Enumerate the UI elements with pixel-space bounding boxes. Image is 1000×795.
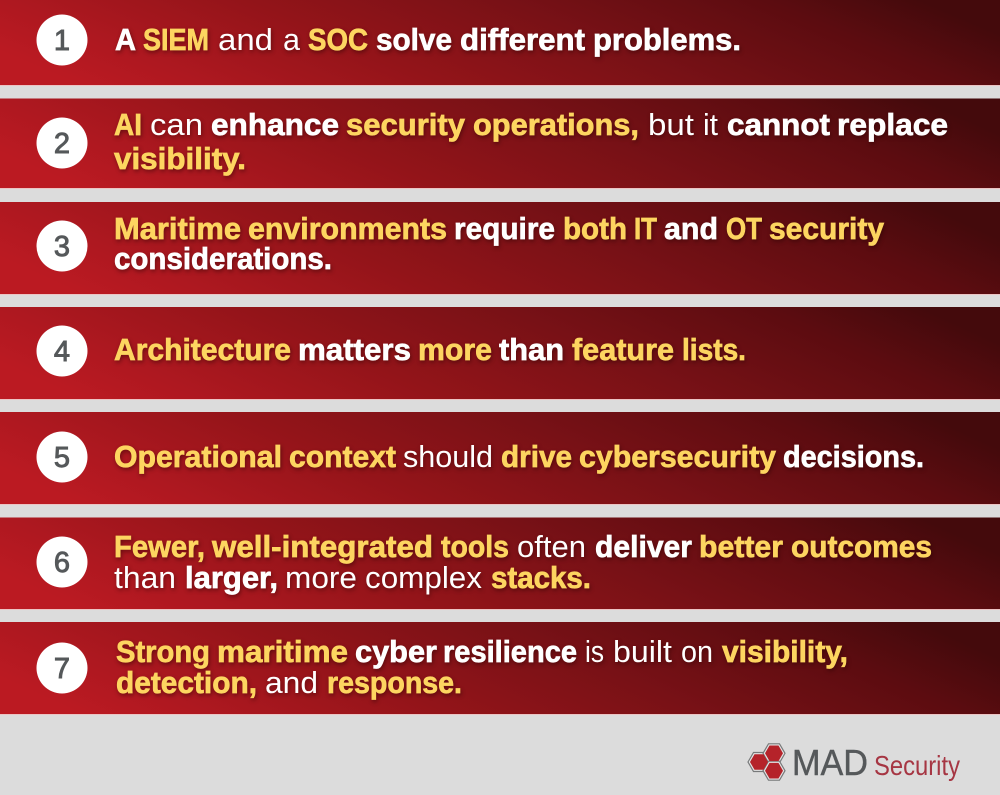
text: takeaway 6: deliver — [595, 529, 692, 564]
text: takeaway 2: cannot — [727, 107, 830, 142]
text: takeaway 6: Fewer, — [114, 529, 205, 564]
number badge 2: 2 — [54, 128, 70, 160]
text: takeaway 2: but — [648, 107, 694, 142]
text: takeaway 7: response. — [327, 665, 462, 700]
logo: MAD Security — [748, 742, 960, 783]
text: takeaway 4 — [114, 332, 746, 367]
number badge 5: 5 — [54, 442, 70, 474]
number badge 1 — [36, 14, 88, 66]
text: takeaway 5: context — [289, 439, 396, 474]
number badge 4 — [36, 326, 88, 376]
text: takeaway 3 — [114, 211, 885, 276]
text: takeaway 2: AI — [114, 107, 142, 142]
text: takeaway 1: solve — [376, 22, 452, 57]
number badge 2 — [36, 118, 88, 168]
text: takeaway 6: more — [285, 560, 357, 595]
text: takeaway 6: than — [114, 560, 176, 595]
number badge 5 — [36, 432, 88, 482]
text: takeaway 3: considerations. — [114, 241, 332, 276]
text: takeaway 3: and — [664, 211, 718, 246]
text: takeaway 7: and — [265, 665, 318, 700]
text: takeaway 2: can — [150, 107, 203, 142]
text: takeaway 1 — [115, 22, 741, 57]
text: takeaway 2: visibility. — [114, 141, 246, 176]
text: takeaway 5: cybersecurity — [579, 439, 777, 474]
text: takeaway 6: stacks. — [491, 560, 591, 595]
text: takeaway 4: Architecture — [114, 332, 291, 367]
number badge 4: 4 — [54, 336, 70, 368]
text: takeaway 5: Operational — [114, 439, 282, 474]
text: takeaway 1: SIEM — [143, 22, 209, 57]
text: takeaway 7: resilience — [443, 634, 577, 669]
text: takeaway 7 — [116, 634, 848, 700]
text: takeaway 6: often — [517, 529, 586, 564]
text: takeaway 6: well-integrated — [211, 529, 433, 564]
text: takeaway 6: better — [699, 529, 783, 564]
text: takeaway 6: larger, — [185, 560, 278, 595]
text: takeaway 6: tools — [441, 529, 509, 564]
text: takeaway 6: complex — [365, 560, 483, 595]
text: takeaway 7: built — [613, 634, 672, 669]
text: takeaway 5: decisions. — [783, 439, 924, 474]
text: takeaway 7: maritime — [217, 634, 348, 669]
text: takeaway 7: visibility, — [722, 634, 848, 669]
text: takeaway 3: environments — [248, 211, 447, 246]
panel: takeaway 5 — [0, 412, 1000, 504]
text: takeaway 4: than — [499, 332, 564, 367]
text: takeaway 6: outcomes — [791, 529, 932, 564]
number badge 7: 7 — [54, 653, 70, 685]
text: takeaway 1: problems. — [593, 22, 741, 57]
panel: takeaway 6 — [0, 518, 1000, 609]
text: takeaway 2: replace — [837, 107, 948, 142]
text: takeaway 5: drive — [501, 439, 572, 474]
number badge 3: 3 — [54, 231, 70, 263]
panel: takeaway 2 — [0, 98, 1000, 188]
text: takeaway 7: on — [681, 634, 713, 669]
text: takeaway 3: both — [563, 211, 627, 246]
number badge 6: 6 — [54, 547, 70, 579]
text: takeaway 1: a — [283, 22, 301, 57]
text: takeaway 3: security — [769, 211, 885, 246]
panel: takeaway 4 — [0, 307, 1000, 399]
text: takeaway 5 — [114, 439, 924, 474]
number badge 1: 1 — [54, 25, 70, 57]
text: takeaway 3: OT — [726, 211, 762, 246]
wordmark: Security: Security — [874, 750, 960, 781]
text: takeaway 2: operations, — [473, 107, 639, 142]
icon: red hexagon cluster — [748, 744, 785, 780]
number badge 6 — [36, 536, 88, 588]
wordmark: MAD: MAD — [792, 742, 868, 783]
text: takeaway 5: should — [403, 439, 493, 474]
text: takeaway 1: A — [115, 22, 136, 57]
text: takeaway 7: cyber — [355, 634, 437, 669]
text: takeaway 4: more — [418, 332, 492, 367]
number badge 7 — [36, 642, 88, 694]
panel: takeaway 3 — [0, 202, 1000, 294]
text: takeaway 2: it — [703, 107, 718, 142]
text: takeaway 4: feature — [572, 332, 674, 367]
text: takeaway 3: IT — [634, 211, 657, 246]
text: takeaway 7: detection, — [116, 665, 257, 700]
text: takeaway 2: security — [346, 107, 466, 142]
text: takeaway 3: require — [454, 211, 555, 246]
panel: takeaway 1 — [0, 0, 1000, 86]
text: takeaway 1: SOC — [308, 22, 368, 57]
panel: takeaway 7 — [0, 622, 1000, 714]
text: takeaway 4: lists. — [682, 332, 746, 367]
text: takeaway 1: different — [460, 22, 585, 57]
text: takeaway 2: enhance — [211, 107, 339, 142]
text: takeaway 2 — [114, 107, 948, 176]
text: takeaway 7: is — [585, 634, 604, 669]
text: takeaway 6 — [114, 529, 932, 595]
text: takeaway 7: Strong — [116, 634, 210, 669]
text: takeaway 4: matters — [298, 332, 411, 367]
number badge 3 — [36, 220, 88, 272]
text: takeaway 1: and — [218, 22, 273, 57]
text: takeaway 3: Maritime — [114, 211, 241, 246]
